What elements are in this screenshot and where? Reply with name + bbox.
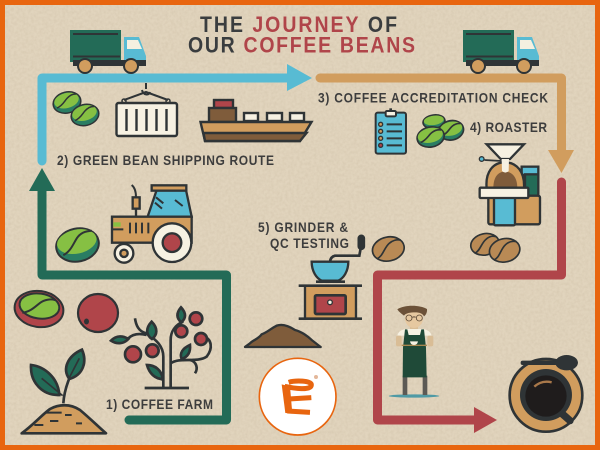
barista figure <box>389 306 439 398</box>
icon: green beans pair <box>51 89 101 129</box>
title: THE JOURNEY OF <box>200 13 397 37</box>
icon: top view coffee cup <box>510 355 582 432</box>
icon: coffee grounds pile <box>245 325 321 347</box>
logo badge <box>259 358 336 435</box>
icon: tractor <box>112 185 192 263</box>
icon: large green bean <box>53 224 102 266</box>
title <box>188 13 415 58</box>
icon: truck right <box>463 30 539 73</box>
icon: truck left <box>70 30 146 73</box>
icon: red coffee cherry <box>78 294 118 332</box>
label: step 4: 4) ROASTER <box>470 119 548 135</box>
label: step 5: QC TESTING <box>270 235 349 251</box>
label: step 5: 5) GRINDER & <box>258 219 348 235</box>
label: step 3: 3) COFFEE ACCREDITATION CHECK <box>318 90 549 106</box>
arrow: green farm route <box>29 168 226 420</box>
arrow: red roasting route <box>378 182 562 433</box>
icon: coffee grinder <box>299 236 364 319</box>
icon: brown roasted beans <box>370 231 522 265</box>
label: step 5 <box>258 219 349 251</box>
label: step 2: 2) GREEN BEAN SHIPPING ROUTE <box>57 152 274 168</box>
icon: split coffee cherry <box>12 288 66 330</box>
title: OUR COFFEE BEANS <box>188 34 415 58</box>
icon: coffee plant <box>111 307 211 388</box>
arrow: blue shipping route <box>42 64 312 161</box>
icon: clipboard checklist <box>376 108 406 154</box>
icon: seedling in soil <box>22 350 106 433</box>
arrow: tan accreditation route <box>320 78 574 173</box>
icon: three green beans <box>415 114 465 150</box>
icon: cargo ship <box>200 100 312 141</box>
icon: roaster machine <box>479 144 540 225</box>
label: step 1: 1) COFFEE FARM <box>106 396 213 412</box>
icon: shipping container <box>116 83 177 136</box>
